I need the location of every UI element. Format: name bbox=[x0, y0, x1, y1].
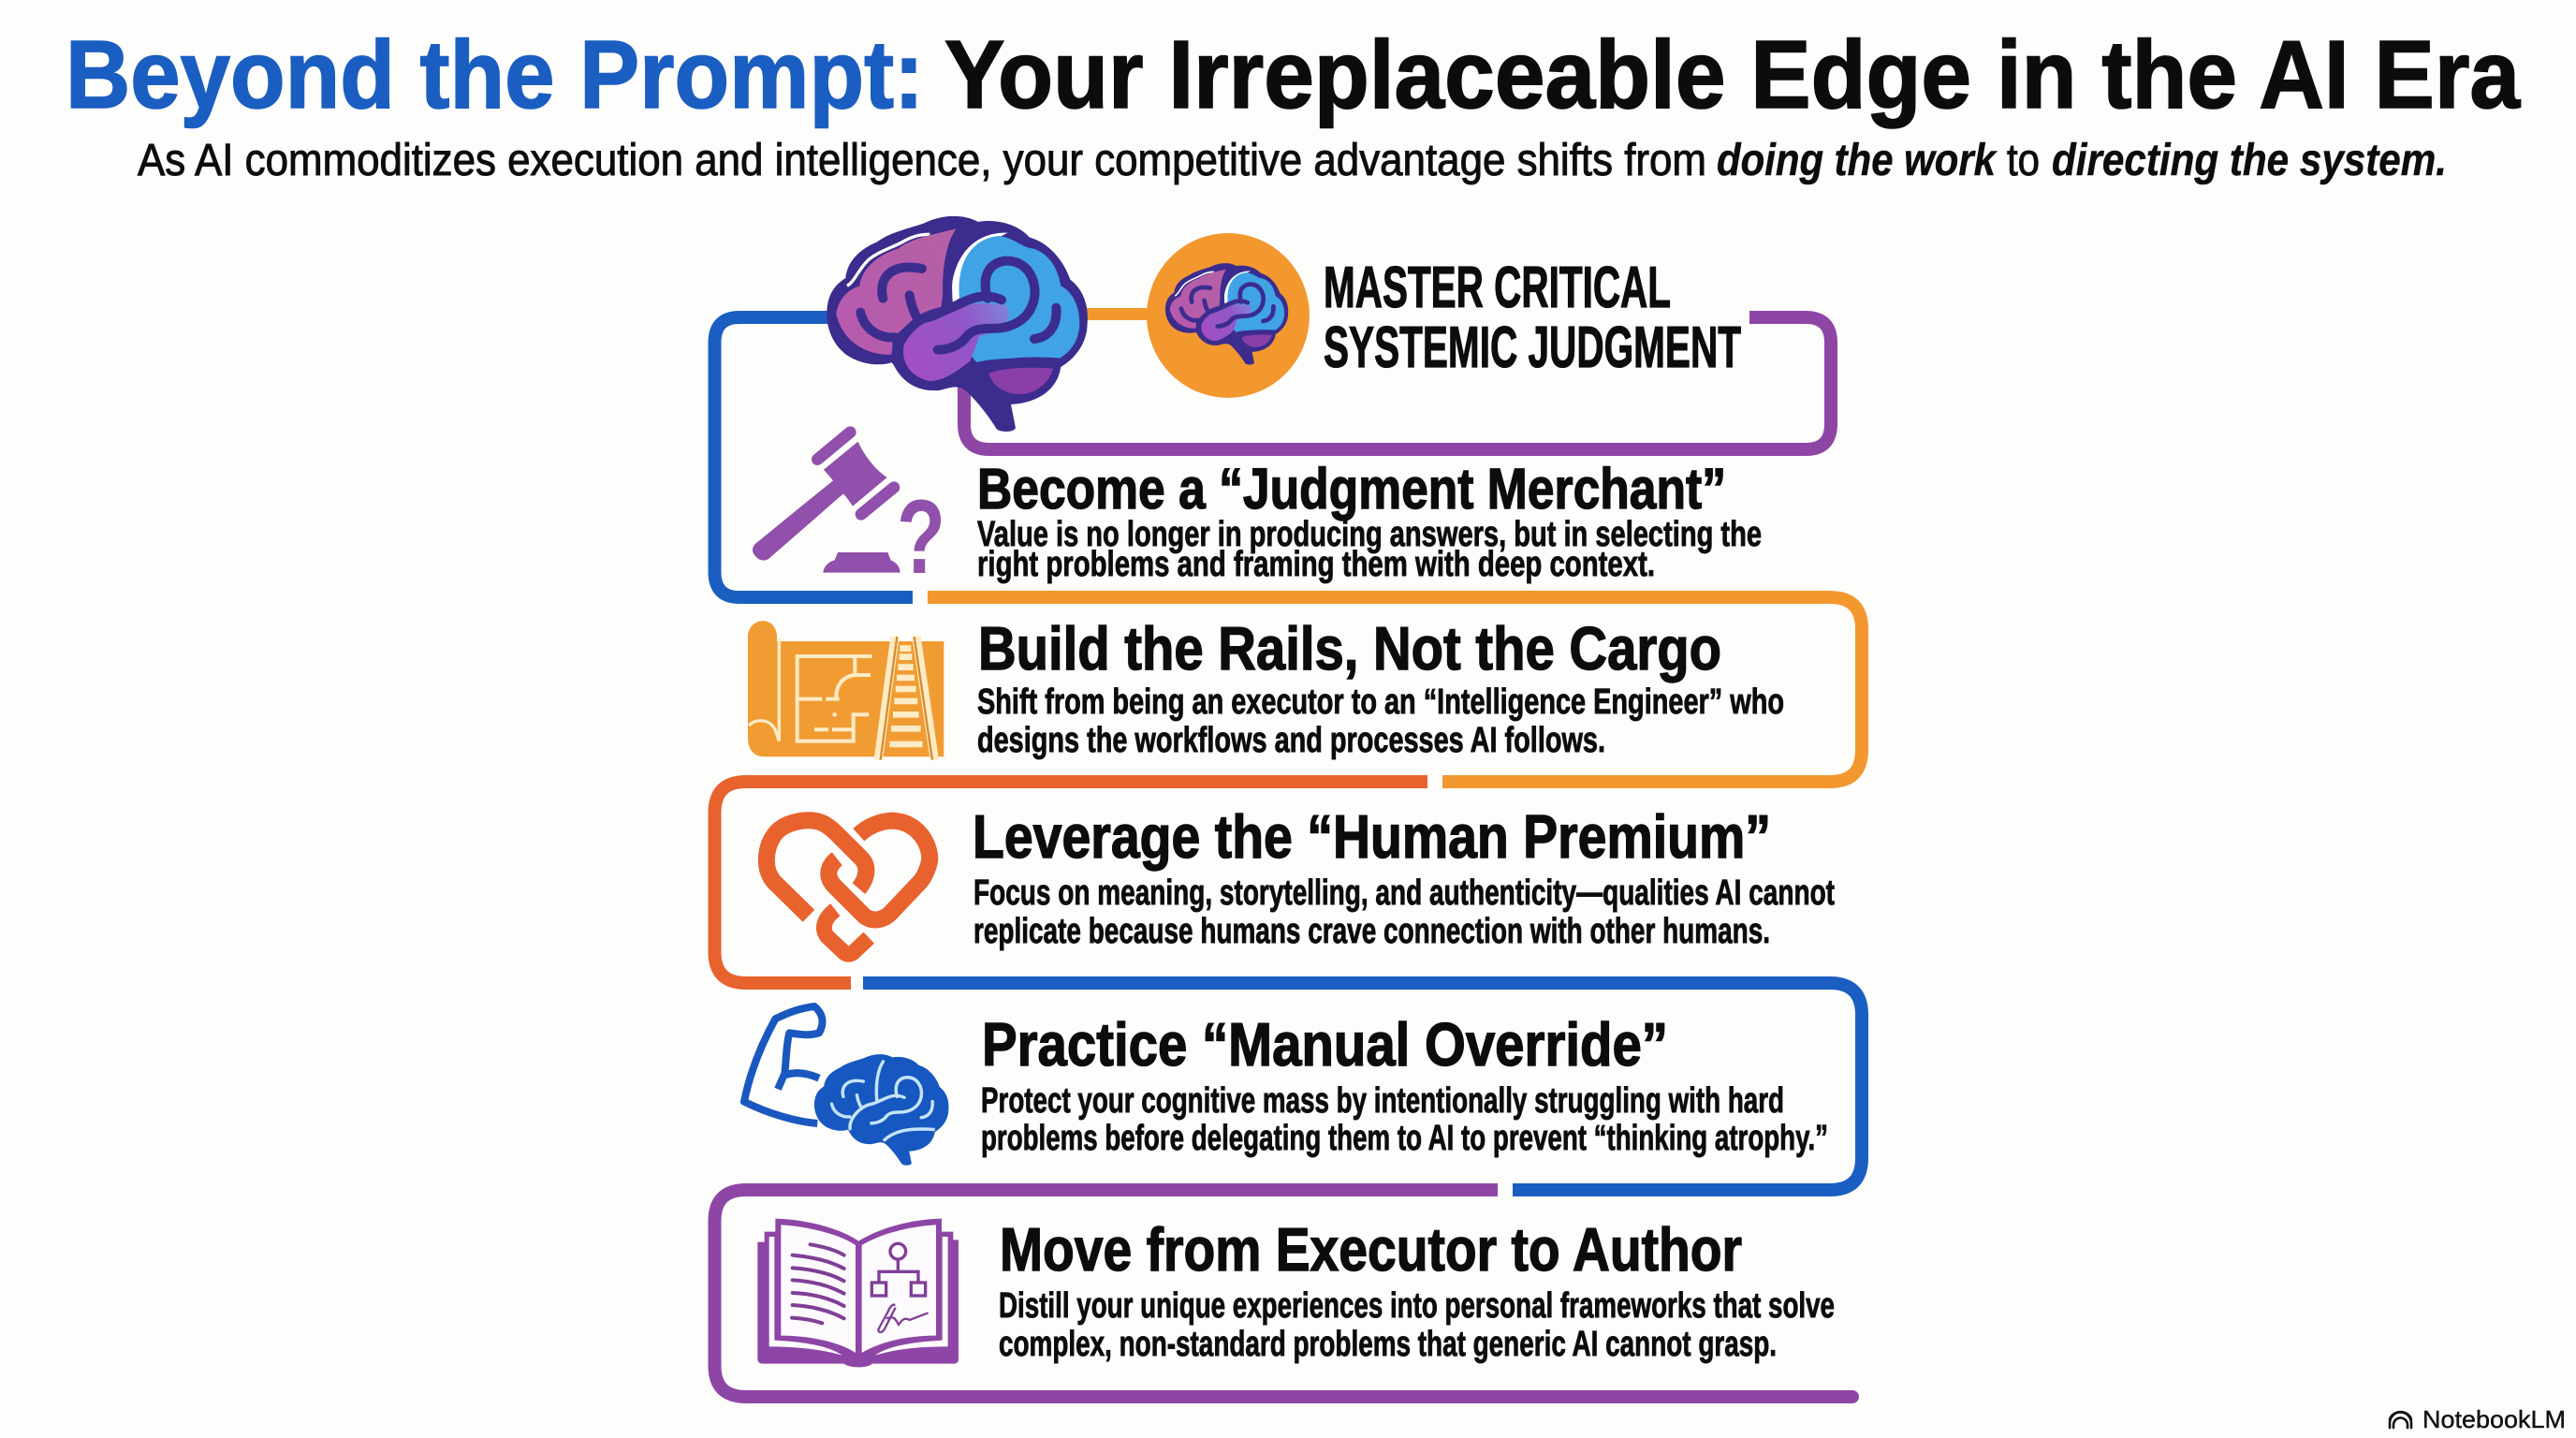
subtitle: doing the work bbox=[1717, 136, 1998, 185]
subtitle: directing the system. bbox=[2052, 136, 2447, 185]
description bbox=[999, 1286, 1835, 1364]
icon: chain heart bbox=[767, 820, 929, 954]
description: right problems and framing them with deep context. bbox=[977, 545, 1655, 584]
heading: Leverage the “Human Premium” bbox=[973, 802, 1771, 871]
icon: blueprint and rails bbox=[748, 621, 944, 760]
title: Beyond the Prompt: bbox=[66, 21, 924, 128]
icon: orange circle with brain bbox=[1147, 233, 1310, 398]
panel: leverage the human premium bbox=[715, 782, 1835, 983]
icon: gavel and question mark bbox=[753, 433, 945, 595]
description: Focus on meaning, storytelling, and authenticity—qualities AI cannot bbox=[973, 873, 1835, 913]
icon: open book with framework bbox=[757, 1219, 959, 1367]
connector: blue frame bbox=[863, 983, 1862, 1190]
heading: master critical bbox=[1324, 256, 1741, 380]
panel: build the rails bbox=[748, 597, 1862, 782]
icon: flexed arm and brain bbox=[744, 1006, 948, 1166]
connector: red-orange frame bbox=[715, 782, 1427, 983]
description: designs the workflows and processes AI follows. bbox=[977, 721, 1605, 760]
description: Protect your cognitive mass by intentionally struggling with hard bbox=[981, 1081, 1784, 1121]
panel: move from executor to author bbox=[715, 1190, 1859, 1403]
icon: large brain bbox=[827, 216, 1088, 432]
description bbox=[977, 682, 1784, 760]
connector: blue frame top-left bbox=[715, 317, 913, 597]
subtitle: As AI commoditizes execution and intelligence, your competitive advantage shifts from bbox=[138, 136, 1706, 185]
description: Shift from being an executor to an “Intelligence Engineer” who bbox=[977, 682, 1784, 722]
description: Value is no longer in producing answers, but in selecting the bbox=[977, 515, 1762, 554]
description: problems before delegating them to AI to prevent “thinking atrophy.” bbox=[981, 1119, 1828, 1158]
description: complex, non-standard problems that generic AI cannot grasp. bbox=[999, 1325, 1777, 1364]
heading: master critical: MASTER CRITICAL bbox=[1324, 256, 1671, 320]
panel: become a judgment merchant bbox=[753, 433, 1762, 595]
description bbox=[981, 1081, 1828, 1158]
description bbox=[973, 873, 1835, 951]
description: Distill your unique experiences into personal frameworks that solve bbox=[999, 1286, 1835, 1326]
connector: orange link bbox=[1081, 308, 1151, 320]
connector: purple frame bbox=[964, 317, 1831, 449]
title bbox=[66, 21, 2521, 128]
connector: purple frame bbox=[715, 1190, 1852, 1397]
panel: practice manual override bbox=[744, 983, 1862, 1190]
panel: master critical systemic judgment bbox=[715, 216, 1831, 597]
heading: master critical: SYSTEMIC JUDGMENT bbox=[1324, 315, 1741, 380]
description: replicate because humans crave connection with other humans. bbox=[973, 912, 1770, 951]
description bbox=[977, 515, 1762, 584]
connector: orange frame bbox=[928, 597, 1862, 782]
heading: Move from Executor to Author bbox=[1000, 1215, 1742, 1284]
subtitle: to bbox=[2007, 136, 2040, 185]
logo: NotebookLM: NotebookLM bbox=[2422, 1405, 2566, 1433]
heading: Become a “Judgment Merchant” bbox=[977, 457, 1726, 521]
heading: Build the Rails, Not the Cargo bbox=[978, 614, 1721, 682]
icon: gavel and question mark: ? bbox=[897, 478, 945, 595]
heading: Practice “Manual Override” bbox=[982, 1010, 1668, 1078]
